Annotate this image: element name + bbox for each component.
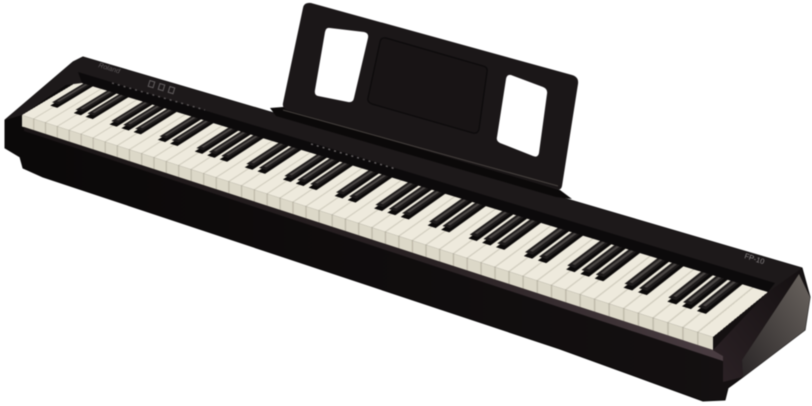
front rail — [24, 127, 723, 361]
white key front faces — [21, 114, 714, 350]
panel markings left — [112, 83, 205, 110]
stand shelf shadow — [270, 107, 572, 199]
stand board with windows — [283, 3, 578, 190]
music stand — [270, 3, 578, 199]
end cap — [713, 268, 802, 382]
stand lip highlight — [283, 110, 558, 186]
key slot band — [78, 72, 775, 292]
panel markings centre — [311, 144, 396, 169]
white key tops and black keys — [22, 82, 768, 338]
model name: FP-10 — [743, 251, 766, 266]
stand recessed panel — [368, 38, 487, 133]
top control panel — [5, 57, 802, 293]
brand text: Roland — [97, 62, 122, 76]
side panel — [742, 274, 810, 377]
control buttons — [148, 81, 175, 94]
